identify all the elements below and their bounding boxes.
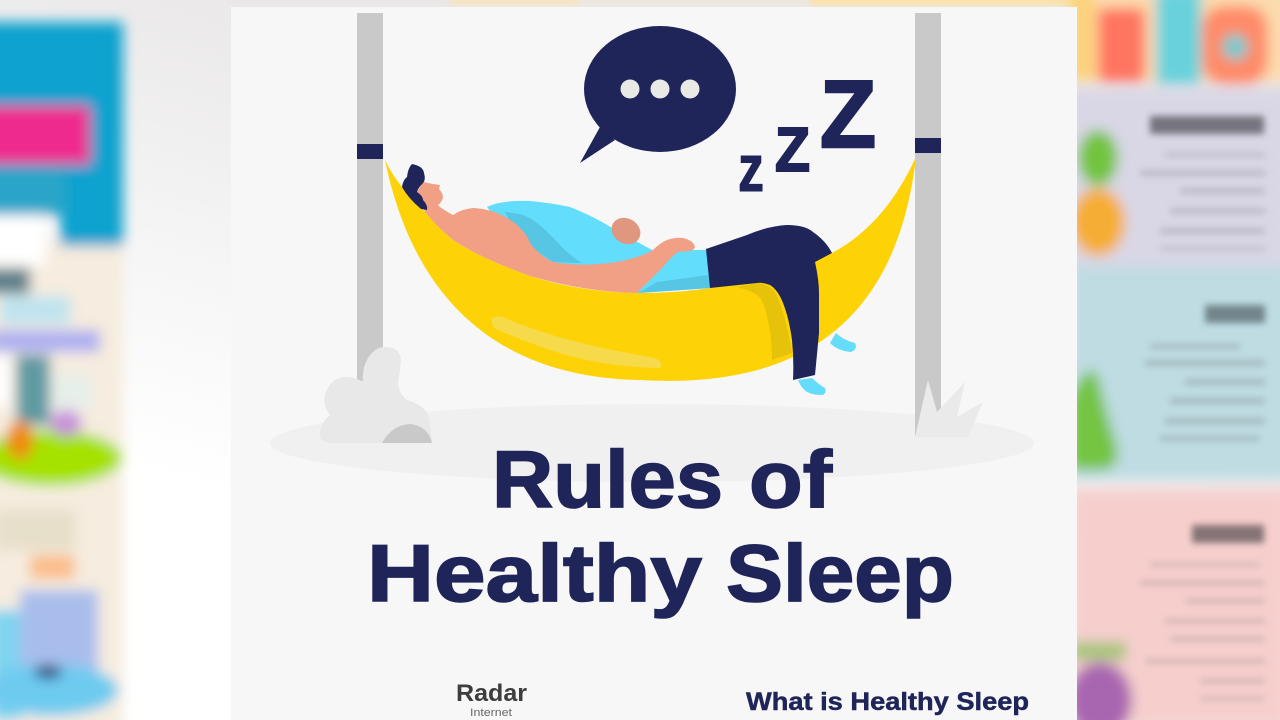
teal block	[1156, 0, 1201, 84]
pink section	[1070, 488, 1280, 720]
text band	[0, 510, 75, 550]
white box	[0, 215, 46, 265]
arm and torso	[425, 207, 695, 293]
title: Rules	[492, 435, 723, 525]
blue header	[0, 22, 123, 177]
icon: sleeping z letters: Z	[820, 61, 876, 168]
blue base	[0, 664, 118, 716]
orange ring	[1202, 6, 1268, 84]
title: of	[749, 435, 833, 525]
icon: shrub	[320, 347, 432, 443]
plum	[1068, 662, 1132, 720]
plum leaves	[1070, 642, 1126, 660]
shirt	[487, 201, 711, 293]
brand logo text	[456, 680, 527, 719]
white area	[0, 356, 10, 406]
panel: blurred right poster	[1068, 0, 1280, 720]
purple flower	[50, 410, 82, 436]
left pole	[357, 13, 383, 381]
pear	[1070, 371, 1118, 470]
illustration: man in hammock	[385, 157, 916, 395]
ground shadow	[270, 404, 1034, 482]
pink heading	[1192, 525, 1264, 543]
hammock highlight	[491, 316, 661, 368]
title: Sleep	[726, 529, 954, 619]
brand logo text: Internet	[470, 707, 512, 719]
panel: main poster	[231, 7, 1077, 720]
blue heading	[1205, 305, 1265, 323]
pineapple body	[1071, 188, 1125, 256]
icon: sleeping z letters: Z	[775, 116, 810, 185]
icon: grass	[915, 380, 983, 437]
hair	[402, 164, 427, 210]
icon: sleeping z letters	[738, 61, 876, 205]
dark strip	[0, 268, 30, 294]
belly hand	[607, 213, 645, 249]
orange shape	[6, 420, 34, 460]
lavender heading	[1150, 116, 1264, 134]
blue section	[1070, 266, 1280, 480]
peach top band	[1070, 0, 1280, 82]
section heading: What is Healthy Sleep	[746, 688, 1029, 716]
right pole	[915, 13, 941, 435]
icon: speech bubble	[580, 26, 736, 163]
top strip behind panel	[230, 0, 1090, 6]
dark blob	[34, 665, 62, 679]
pink banner	[0, 106, 90, 164]
purple band	[0, 330, 100, 352]
brand logo text: Radar	[456, 680, 527, 707]
far foot	[830, 333, 856, 352]
orange band	[30, 555, 75, 579]
poster sheet	[231, 7, 1077, 720]
hammock fold shadow	[737, 283, 792, 360]
yellow top	[1070, 0, 1095, 80]
blue header lower	[60, 170, 123, 246]
beige poster body	[0, 240, 123, 720]
panel: blurred left poster	[0, 22, 123, 720]
near foot	[798, 378, 826, 395]
shirt shadow	[505, 212, 582, 263]
head	[417, 182, 443, 216]
green ground	[0, 430, 122, 486]
icon: sleeping z letters: z	[738, 131, 764, 205]
title	[367, 435, 954, 619]
blurred text blocks on right poster	[1140, 116, 1265, 701]
pineapple leaves	[1078, 130, 1118, 186]
hammock	[385, 157, 916, 381]
title: Healthy	[367, 529, 702, 619]
red block	[1098, 8, 1145, 82]
plant stem	[16, 355, 50, 425]
blue lower block	[0, 610, 20, 720]
trousers	[706, 225, 832, 380]
ring centre	[1222, 34, 1248, 60]
lavender section	[1070, 88, 1280, 266]
lower shirt shadow	[638, 275, 711, 293]
